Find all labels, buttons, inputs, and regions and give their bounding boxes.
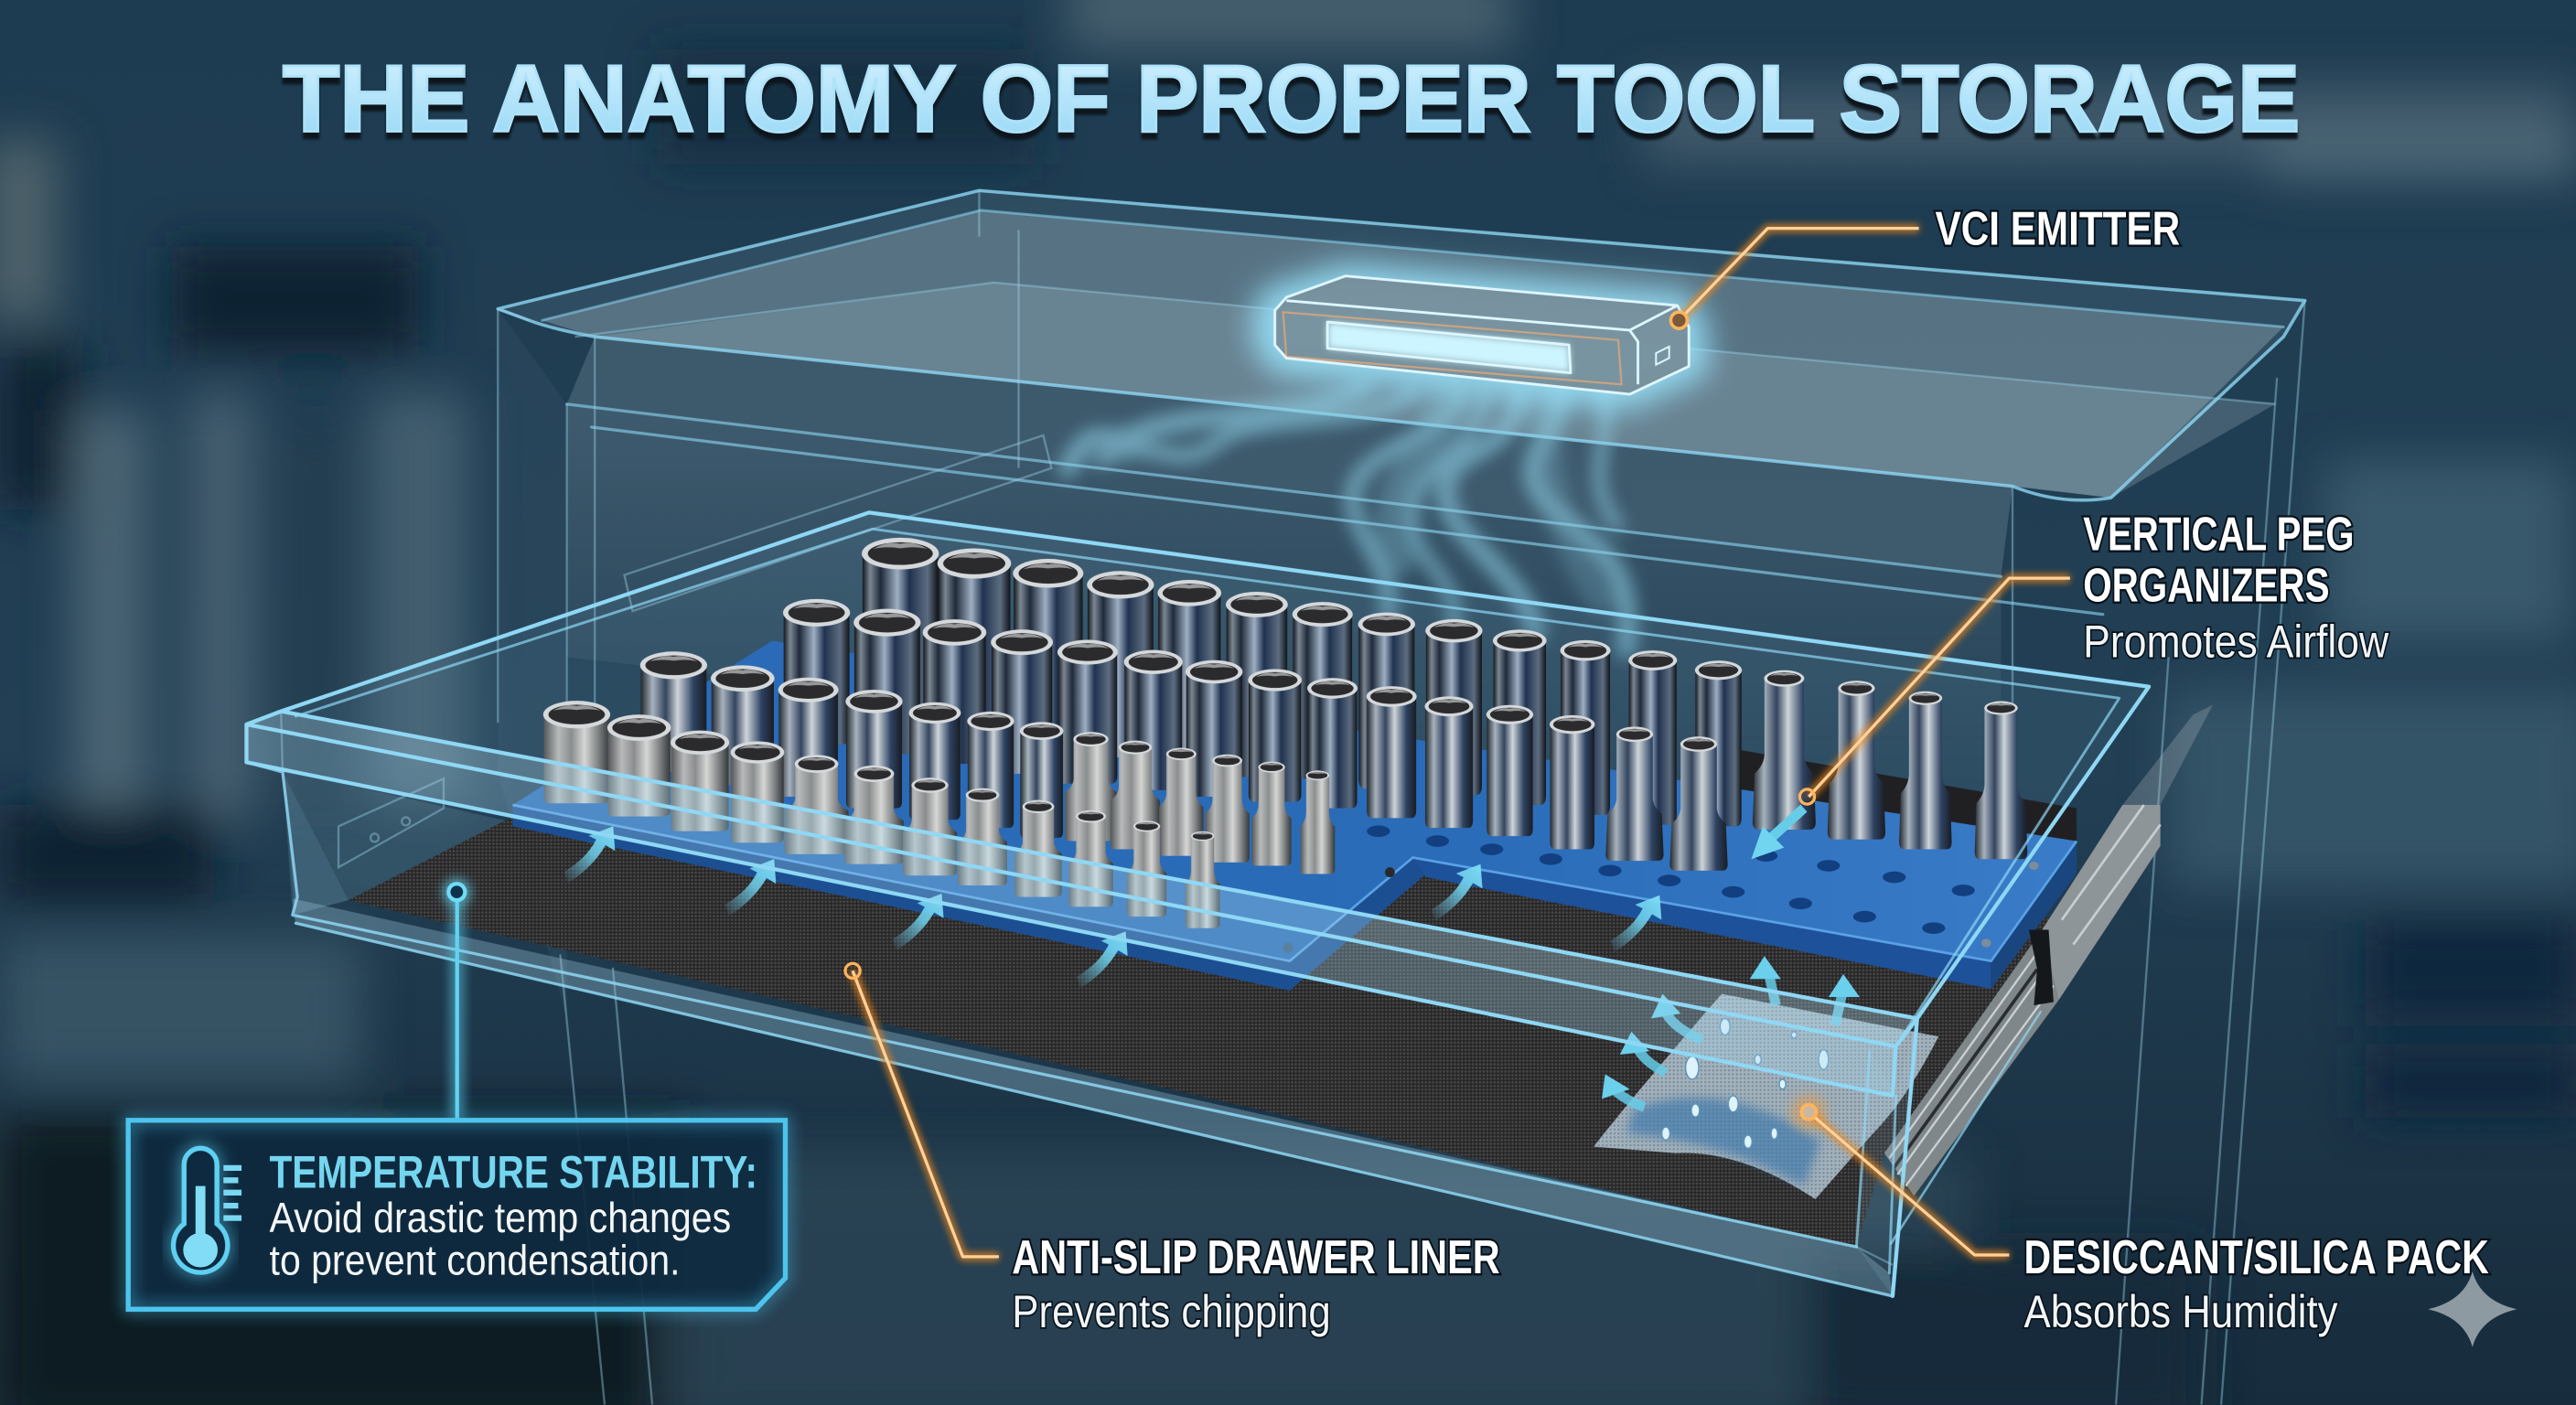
callout body: Avoid drastic temp changes [270, 1194, 731, 1241]
anti-slip drawer liner [349, 801, 2070, 1247]
label: vertical peg organizers: VERTICAL PEG [2083, 509, 2355, 562]
label: desiccant silica pack [2024, 1231, 2489, 1337]
callout heading: TEMPERATURE STABILITY: [270, 1145, 757, 1197]
title: THE ANATOMY OF PROPER TOOL STORAGE [283, 47, 2300, 153]
dark backing strip behind peg board [1734, 749, 2077, 841]
socket row 3 [640, 651, 1335, 874]
moisture arrows [1610, 970, 1843, 1107]
label: vertical peg organizers: Promotes Airflow [2083, 615, 2389, 667]
desiccant silica pack [1594, 993, 1938, 1199]
leader: anti-slip drawer liner [845, 963, 999, 1257]
drawer: front glass rail [246, 512, 2149, 1296]
connector: temperature callout [448, 884, 465, 1121]
socket row 4 [543, 701, 1219, 928]
drawer: back glass walls [246, 512, 2149, 1018]
socket row 1 [862, 538, 2027, 859]
panel: temperature stability callout [128, 1121, 785, 1309]
icon: thermometer [174, 1148, 242, 1272]
leader: desiccant pack [1791, 1094, 2009, 1255]
icon: sparkle watermark [2428, 1271, 2517, 1347]
label: desiccant silica pack: Absorbs Humidity [2024, 1285, 2338, 1337]
label: anti-slip drawer liner [1012, 1231, 1500, 1337]
leader: vertical peg organizers [1799, 578, 2070, 804]
label: vertical peg organizers [2083, 509, 2389, 667]
smoke: vapor wisps from emitter [1068, 386, 1627, 649]
callout body [270, 1194, 731, 1284]
label: vertical peg organizers: ORGANIZERS [2083, 559, 2330, 612]
vertical peg organizer board [512, 640, 2077, 991]
arrow: peg organizer pointer [1751, 809, 1804, 859]
airflow arrows [564, 826, 1661, 988]
callout body: to prevent condensation. [270, 1237, 681, 1284]
label: anti-slip drawer liner: Prevents chipping [1012, 1285, 1331, 1337]
drawer runner: metal slide [1884, 704, 2213, 1243]
water droplets [1662, 1018, 1829, 1148]
socket row 2 [783, 599, 1728, 871]
leader: VCI emitter [1670, 229, 1919, 328]
cabinet: translucent lid and frame [498, 190, 2305, 1404]
peg holes [1283, 825, 2039, 953]
label: VCI emitter: VCI EMITTER [1936, 203, 2180, 256]
label: anti-slip drawer liner: ANTI-SLIP DRAWER LINER [1012, 1231, 1500, 1284]
VCI emitter device [1251, 263, 1709, 411]
